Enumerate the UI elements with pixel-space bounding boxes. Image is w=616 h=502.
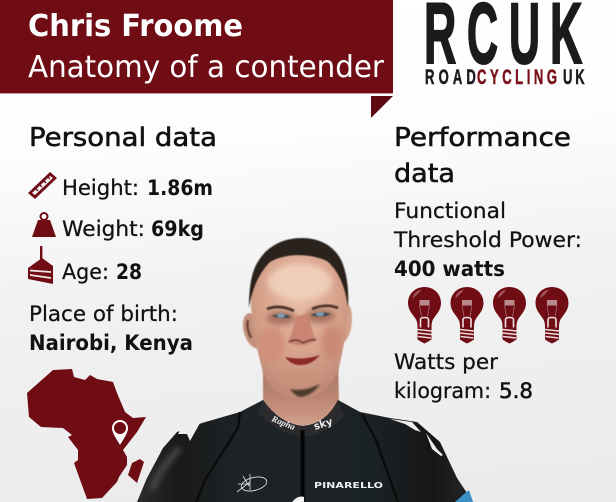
weight text: Weight: bbox=[62, 217, 145, 241]
face bbox=[251, 250, 348, 399]
icon: ruler bbox=[28, 172, 57, 199]
functional threshold power text bbox=[393, 199, 582, 281]
neck bbox=[263, 360, 339, 426]
logo: RCUK: ROAD bbox=[425, 65, 476, 89]
weight value: 69kg bbox=[151, 217, 204, 241]
watts per kilogram text: Watts per bbox=[394, 350, 498, 374]
height text: Height: bbox=[62, 176, 139, 200]
jersey logo: sky: sky bbox=[313, 416, 335, 433]
subtitle: Anatomy of a contender bbox=[28, 50, 385, 85]
watts per kilogram text: kilogram: bbox=[394, 379, 491, 403]
logo: RCUK: UK bbox=[563, 65, 585, 89]
age text: Age: bbox=[62, 260, 109, 284]
portrait: cyclist bbox=[137, 238, 473, 502]
title banner bbox=[0, 0, 393, 94]
functional threshold power text: Functional bbox=[394, 199, 506, 223]
heading: performance data: Performance bbox=[394, 123, 571, 153]
banner fold bbox=[371, 96, 393, 118]
map: Africa with pin bbox=[27, 369, 146, 499]
facial features bbox=[267, 306, 338, 397]
functional threshold power text: Threshold Power: bbox=[393, 228, 582, 252]
ears bbox=[243, 305, 352, 349]
heading: personal data: Personal data bbox=[29, 123, 217, 153]
watts per kilogram text bbox=[394, 350, 533, 403]
jersey bbox=[137, 400, 473, 502]
functional threshold power text: 400 watts bbox=[394, 257, 505, 281]
height value: 1.86m bbox=[147, 176, 213, 200]
heading: performance data bbox=[394, 123, 571, 189]
icon: light bulbs bbox=[408, 287, 568, 344]
logo: RCUK: CYCLING bbox=[477, 65, 557, 89]
place of birth label: Place of birth: bbox=[29, 302, 178, 326]
age value: 28 bbox=[116, 260, 142, 284]
title: name: Chris Froome bbox=[28, 9, 243, 44]
logo: RCUK bbox=[424, 0, 585, 89]
watts per kilogram text: 5.8 bbox=[499, 379, 533, 403]
icon: birthday cake bbox=[28, 246, 53, 284]
hair bbox=[249, 238, 348, 308]
jersey logo: Pinarello: PINARELLO bbox=[314, 481, 383, 490]
jersey logo: Rapha: Rapha bbox=[269, 413, 297, 432]
heading: performance data: data bbox=[394, 159, 455, 189]
icon: weight bbox=[32, 213, 56, 237]
place of birth value: Nairobi, Kenya bbox=[29, 331, 193, 355]
jersey logo: champion emblem bbox=[237, 474, 268, 493]
